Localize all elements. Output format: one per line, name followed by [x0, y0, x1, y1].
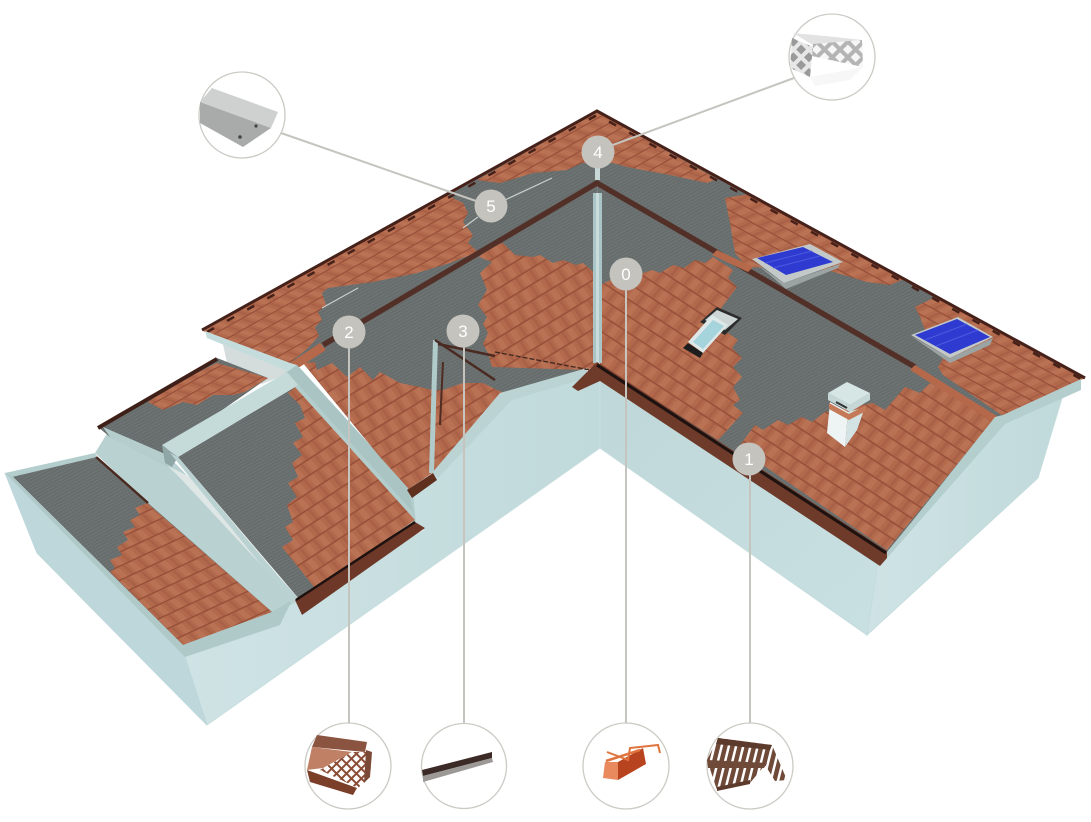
callout 0: 0: [621, 265, 631, 284]
house walls: [5, 340, 1062, 725]
callout 1: 1: [744, 450, 754, 469]
ridge lines: [290, 183, 1000, 424]
product circle 0: orange comb: [583, 723, 669, 809]
backing plates between roofs: [95, 368, 416, 615]
icon: solar panel lower: [911, 317, 993, 363]
callout 1: [732, 442, 766, 476]
lower-right roof slope: [597, 183, 997, 552]
callout 3: [446, 314, 480, 348]
gutter: middle roof: [295, 522, 425, 615]
lower-left roof slope: [303, 183, 597, 490]
icon: chimney: [827, 382, 870, 447]
far-left lean-to roof: [5, 358, 292, 657]
valley flashing: [593, 166, 602, 363]
product circle 2: copper vent: [305, 723, 391, 809]
upper roof slope (back): [203, 111, 1085, 418]
gutter: main eaves: [407, 362, 887, 566]
callout 2: 2: [344, 323, 354, 342]
leader lines: [281, 78, 794, 724]
dormer frame: [429, 340, 590, 473]
eaves trim: [202, 111, 1085, 379]
product circle 1: brown comb vent: [707, 723, 793, 809]
product circle 5: metal flashing: [199, 72, 285, 158]
callout 4: [582, 136, 614, 168]
callout 3: 3: [458, 322, 468, 341]
product circle 4: perforated angle: [789, 14, 875, 100]
callout 4: 4: [593, 143, 603, 162]
barge boards: [205, 331, 1081, 566]
callout 5: 5: [486, 197, 496, 216]
middle lean-to roof: [162, 372, 425, 615]
icon: skylight: [683, 307, 742, 358]
callout 0: [610, 258, 642, 290]
product circle 3: dark strip: [422, 724, 506, 808]
icon: solar panel upper: [752, 244, 843, 289]
callout 5: [474, 190, 508, 222]
callout 2: [332, 316, 366, 348]
